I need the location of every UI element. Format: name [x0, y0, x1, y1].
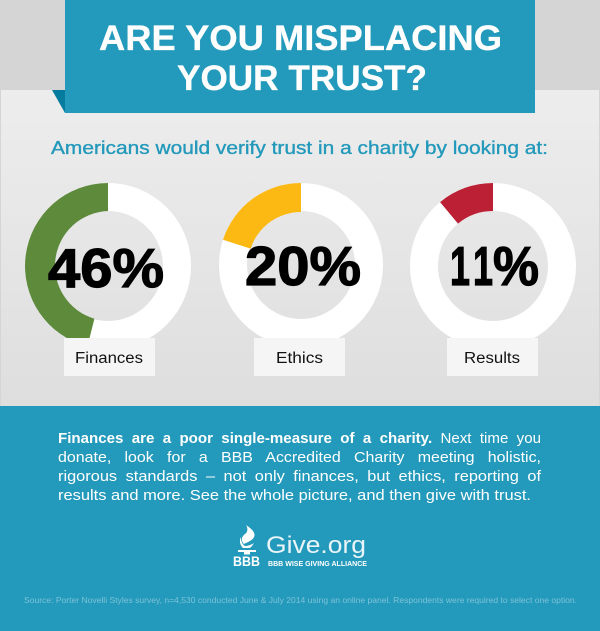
donut chart: ethics 20%	[223, 183, 369, 333]
panel: footer	[0, 406, 600, 631]
Give.org wordmark: Give.org	[266, 532, 366, 559]
label: finances	[64, 338, 155, 376]
body text: donate, look for a BBB Accredited Charity meeting holistic,	[58, 450, 541, 466]
banner fold	[52, 90, 65, 113]
donut chart: ethics 20%: 20%	[245, 235, 361, 297]
source note: Source: Porter Novelli Styles survey, n=4,530 conducted June & July 2014 using an online panel. Respondents were required to select one option.	[24, 595, 577, 605]
label: results: Results	[464, 350, 520, 367]
label: ethics: Ethics	[276, 350, 323, 367]
subtitle: Americans would verify trust in a charity by looking at:	[51, 138, 548, 158]
label: finances: Finances	[75, 350, 143, 367]
panel: charts background	[1, 90, 599, 406]
donut chart: results 11%	[424, 183, 562, 335]
title banner: YOUR TRUST?	[177, 59, 427, 98]
value: 11%: 1	[450, 235, 470, 297]
body text: rigorous standards – not only finances, but ethics, reporting of	[58, 469, 542, 485]
body text: Finances are a poor single-measure of a charity. Next time you	[58, 431, 541, 447]
icon: BBB torch	[238, 525, 256, 554]
BBB wordmark: BBB	[233, 553, 260, 569]
title banner: ARE YOU MISPLACING	[99, 19, 502, 58]
header background strip	[0, 0, 600, 90]
label: ethics	[254, 338, 345, 376]
body text: results and more. See the whole picture, and then give with trust.	[58, 488, 531, 504]
body text	[58, 431, 542, 504]
donut chart: finances 46%	[25, 183, 177, 346]
label: results	[447, 338, 538, 376]
alliance tagline: BBB WISE GIVING ALLIANCE	[268, 559, 367, 568]
title banner	[65, 0, 535, 113]
value: 11%	[450, 235, 539, 297]
logo: BBB Give.org	[233, 525, 367, 569]
donut chart: finances 46%: 46%	[48, 237, 164, 299]
value: 11%: %	[493, 235, 539, 297]
value: 11%: 1	[473, 235, 493, 297]
